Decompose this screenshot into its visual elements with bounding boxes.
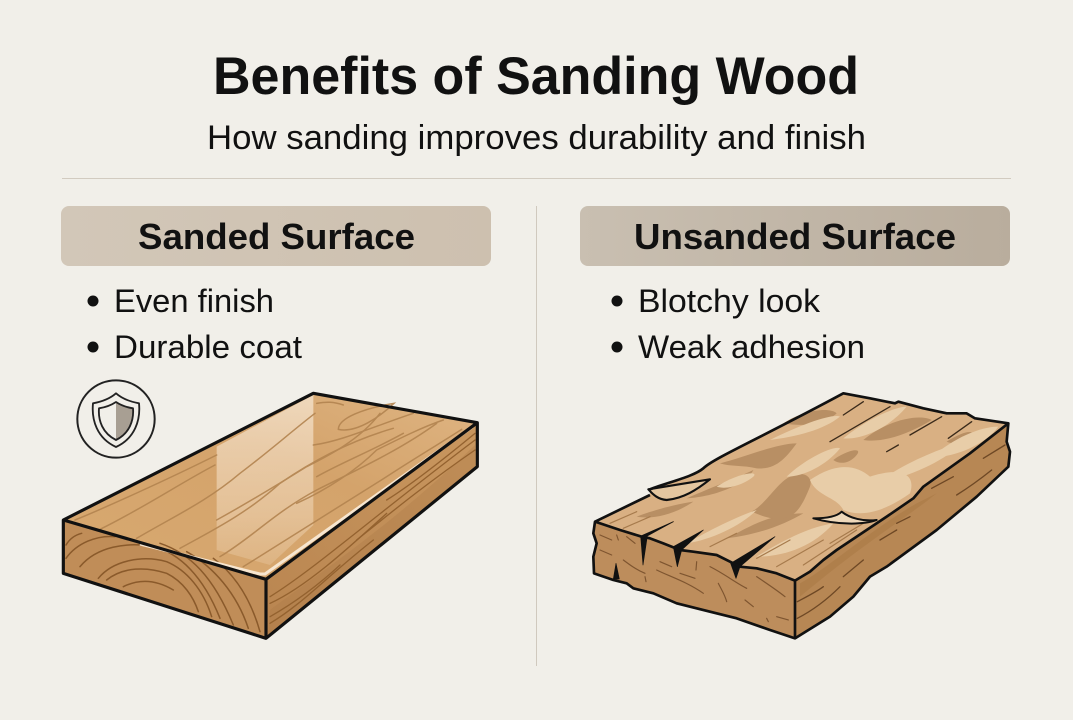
- top face: [63, 393, 477, 579]
- side grain: [270, 433, 475, 623]
- side face: [266, 423, 477, 638]
- unsanded header: [580, 206, 1010, 266]
- icon: shield: [77, 380, 155, 458]
- light blotches: [687, 407, 998, 557]
- sanded bullet list: [88, 283, 302, 365]
- surface cracks: [830, 402, 972, 452]
- sanded header: [61, 206, 491, 266]
- side marks: [797, 445, 1005, 618]
- top face: [595, 393, 1008, 581]
- illustration: sanded wood board: [63, 393, 477, 638]
- top grain marks: [610, 512, 863, 567]
- sanded header: Sanded Surface: [138, 216, 415, 257]
- dark blotches: [637, 410, 973, 538]
- side bands: [800, 493, 937, 597]
- unsanded bullet list: [612, 283, 865, 365]
- unsanded header: Unsanded Surface: [634, 216, 956, 257]
- side face: [795, 423, 1010, 638]
- front marks: [600, 535, 788, 622]
- top grain: [75, 402, 462, 567]
- gloss highlight: [217, 395, 313, 565]
- bright edge: [140, 427, 473, 574]
- side bands: [268, 445, 475, 635]
- cracks: [613, 522, 775, 579]
- subtitle: How sanding improves durability and finish: [207, 119, 866, 157]
- outline: [593, 393, 1010, 638]
- outline: [63, 393, 477, 638]
- panel: unsanded surface: [580, 206, 1010, 638]
- illustration: rough wood board: [593, 393, 1010, 638]
- panel: sanded surface: [61, 206, 491, 638]
- front grain: [66, 533, 260, 632]
- curling splinters: [648, 479, 710, 500]
- sanded bullet list: Even finish: [114, 283, 274, 319]
- unsanded bullet list: Blotchy look: [638, 283, 821, 319]
- sanded bullet list: Durable coat: [114, 329, 302, 365]
- title: Benefits of Sanding Wood: [213, 47, 859, 106]
- front face: [63, 520, 266, 638]
- front face: [593, 522, 795, 638]
- unsanded bullet list: Weak adhesion: [638, 329, 865, 365]
